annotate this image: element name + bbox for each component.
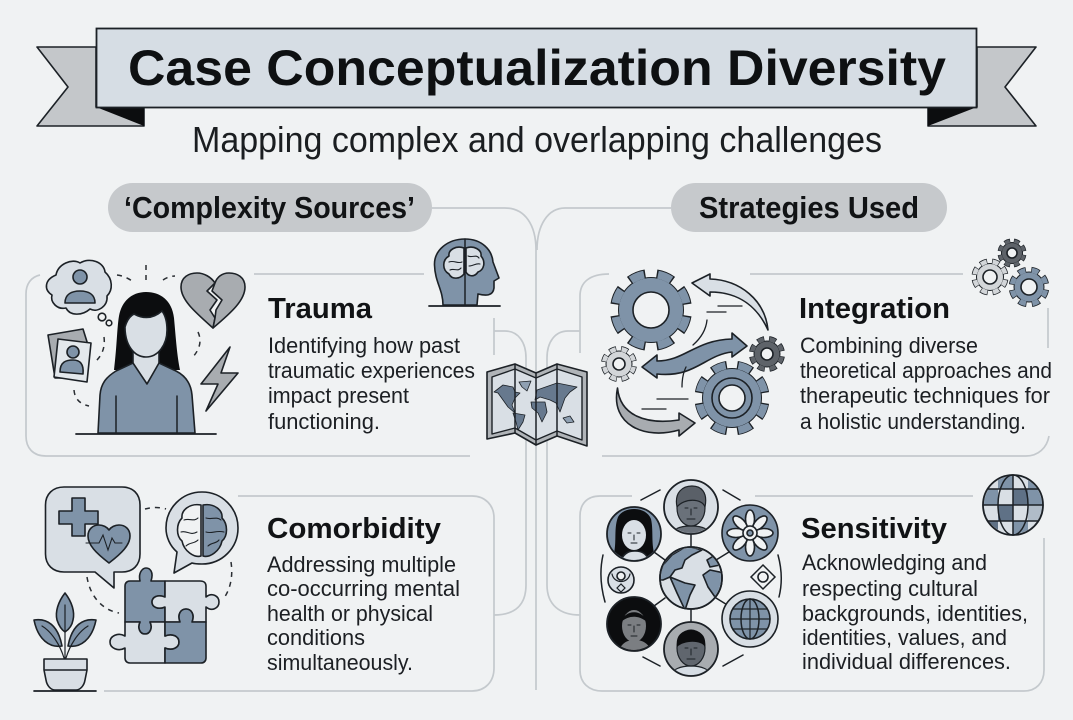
icon: broken heart [181, 273, 245, 328]
text: trauma body [268, 333, 475, 434]
pill: strategies used [671, 183, 947, 232]
connector lines [432, 208, 671, 690]
icon: small emblem [608, 567, 634, 593]
text: sensitivity body: individual differences. [802, 649, 1011, 674]
icon: small dark gear [752, 339, 782, 369]
icon: photos [48, 329, 91, 382]
icon: flower medallion [722, 505, 778, 561]
icon: large gear bottom [699, 365, 765, 431]
text: sensitivity body: respecting cultural [802, 576, 978, 601]
text: integration body: theoretical approaches and [800, 358, 1052, 383]
icon: health speech bubble [46, 487, 140, 588]
icon: potted plant [34, 593, 96, 691]
panel: comorbidity [34, 487, 494, 691]
icon: thought cloud [46, 260, 112, 326]
text: integration body: a holistic understanding. [800, 409, 1026, 434]
icon: folded world map [487, 364, 587, 446]
dashed links [87, 508, 232, 613]
text: integration body [800, 333, 1052, 434]
text: trauma body: Identifying how past [268, 333, 461, 358]
icon: lightning [201, 347, 238, 411]
icon: small light gear [604, 349, 634, 379]
text: comorbidity body: simultaneously. [267, 650, 413, 675]
heading: integration: Integration [799, 293, 950, 325]
dashed accents [74, 265, 200, 406]
heading: trauma: Trauma [268, 293, 373, 325]
text: sensitivity body: Acknowledging and [802, 550, 987, 575]
icon: globe centre [658, 546, 724, 610]
text: comorbidity body: conditions [267, 625, 365, 650]
icon: brain head [429, 239, 500, 306]
icon: small diamond [751, 565, 775, 589]
arrow: middle double [642, 333, 747, 378]
text: sensitivity body: identities, values, and [802, 625, 1007, 650]
icon: portrait man top [664, 480, 718, 540]
icon: portrait woman bottom left [607, 597, 661, 652]
pill: complexity sources [108, 183, 432, 232]
title: Case Conceptualization Diversity [128, 40, 946, 96]
text: comorbidity body: Addressing multiple [267, 552, 456, 577]
pill: complexity sources: ‘Complexity Sources’ [124, 190, 415, 225]
panel: trauma [26, 239, 500, 456]
motion lines [642, 306, 742, 409]
pill: strategies used: Strategies Used [699, 190, 919, 225]
panel: integration [580, 241, 1052, 456]
icon: large gear top [615, 274, 687, 346]
icon: portrait woman top left [607, 507, 661, 562]
icon: globe top right [983, 475, 1043, 535]
text: sensitivity body [802, 550, 1028, 674]
title banner [37, 28, 1036, 126]
heading: sensitivity: Sensitivity [801, 513, 947, 545]
network links and arcs [601, 490, 781, 666]
text: comorbidity body: co-occurring mental [267, 576, 460, 601]
icon: wireframe globe medallion [722, 591, 778, 647]
text: integration body: Combining diverse [800, 333, 978, 358]
arrow: bottom curved [616, 388, 695, 436]
text: trauma body: impact present [268, 383, 410, 408]
icon: puzzle [110, 568, 219, 663]
arrow: top curved [692, 274, 768, 330]
subtitle: Mapping complex and overlapping challenges [192, 119, 882, 160]
icon: portrait man bottom [664, 622, 718, 680]
text: sensitivity body: backgrounds, identities, [802, 601, 1028, 626]
heading: comorbidity: Comorbidity [267, 513, 441, 545]
icon: gear cluster [974, 241, 1046, 304]
icon: brain speech bubble [166, 492, 238, 573]
text: comorbidity body [267, 552, 460, 675]
text: integration body: therapeutic techniques for [800, 383, 1050, 408]
panel: sensitivity [580, 475, 1044, 691]
text: trauma body: traumatic experiences [268, 358, 475, 383]
icon: woman silhouette [76, 292, 216, 434]
text: comorbidity body: health or physical [267, 601, 433, 626]
text: trauma body: functioning. [268, 409, 380, 434]
